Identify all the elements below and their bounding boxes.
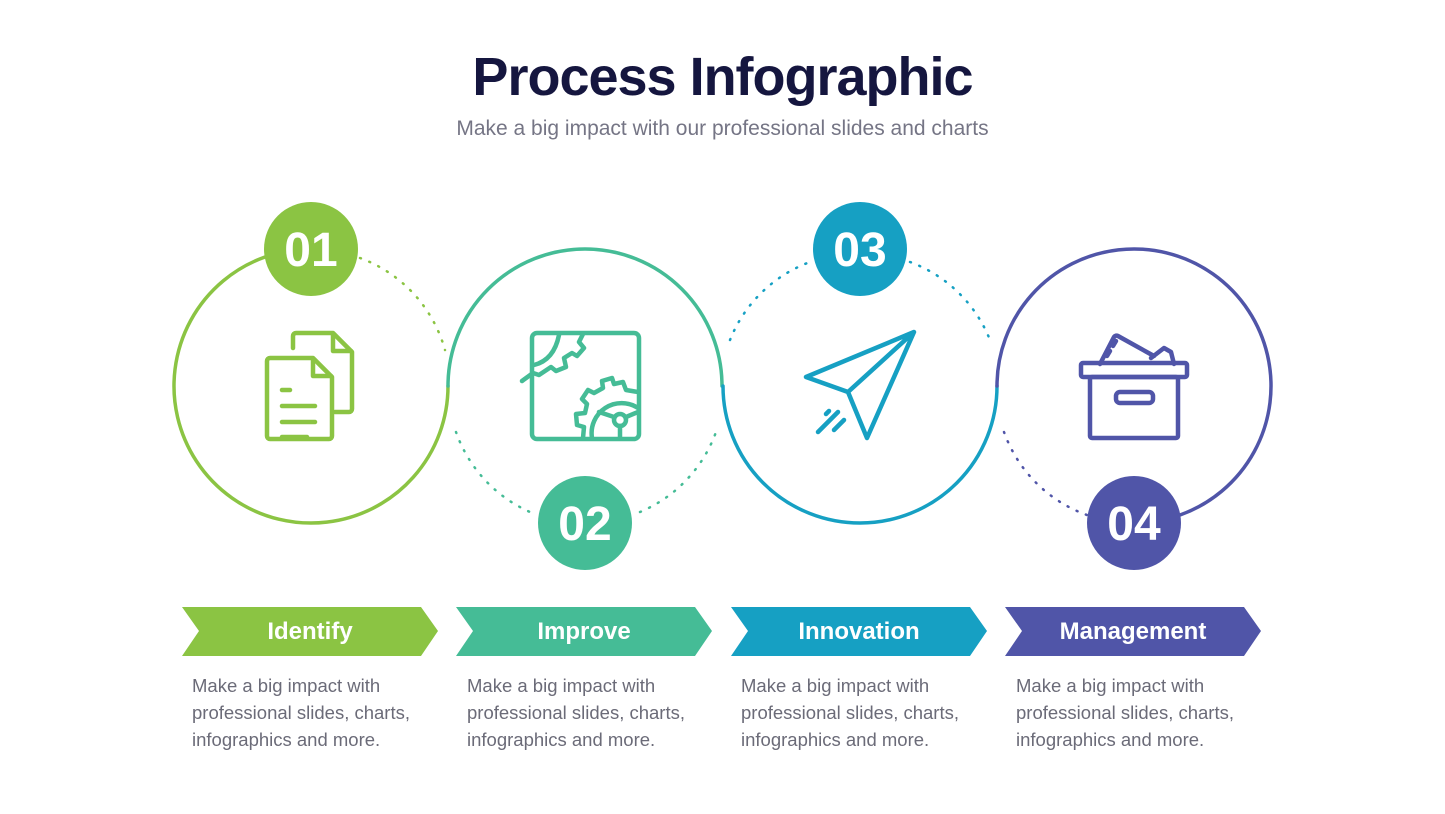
- badge 01: 01: [284, 224, 338, 277]
- badge 04: 04: [1107, 498, 1161, 551]
- text: step 4: Make a big impact with professional slides, charts, infographics and more.: [1016, 675, 1234, 750]
- chevron: Innovation: [731, 607, 987, 656]
- title: Process Infographic: [472, 47, 973, 107]
- chevron: Improve: Improve: [537, 618, 631, 645]
- icon: gears board: [522, 333, 639, 439]
- circle 2: [448, 249, 722, 512]
- badge 04: [1087, 476, 1181, 570]
- text: step 2: Make a big impact with professional slides, charts, infographics and more.: [467, 675, 685, 750]
- icon: archive box: [1081, 336, 1187, 438]
- chevron: Improve: [456, 607, 712, 656]
- chevron: Identify: [182, 607, 438, 656]
- badge 03: [813, 202, 907, 296]
- chevron: Management: [1005, 607, 1261, 656]
- icon: documents: [267, 333, 352, 439]
- badge 01: [264, 202, 358, 296]
- badge 02: 02: [558, 498, 612, 551]
- subtitle: Make a big impact with our professional slides and charts: [456, 117, 989, 140]
- circle 3: [723, 262, 997, 523]
- badge 03: 03: [833, 224, 887, 277]
- icon: paper plane: [806, 332, 914, 438]
- chevron: Identify: Identify: [267, 618, 353, 645]
- badge 02: [538, 476, 632, 570]
- circle 1: [174, 257, 448, 523]
- circle 4: [997, 249, 1271, 515]
- chevron: Management: Management: [1060, 618, 1206, 645]
- text: step 1: Make a big impact with professional slides, charts, infographics and more.: [192, 675, 410, 750]
- chevron: Innovation: Innovation: [798, 618, 920, 645]
- text: step 3: Make a big impact with professional slides, charts, infographics and more.: [741, 675, 959, 750]
